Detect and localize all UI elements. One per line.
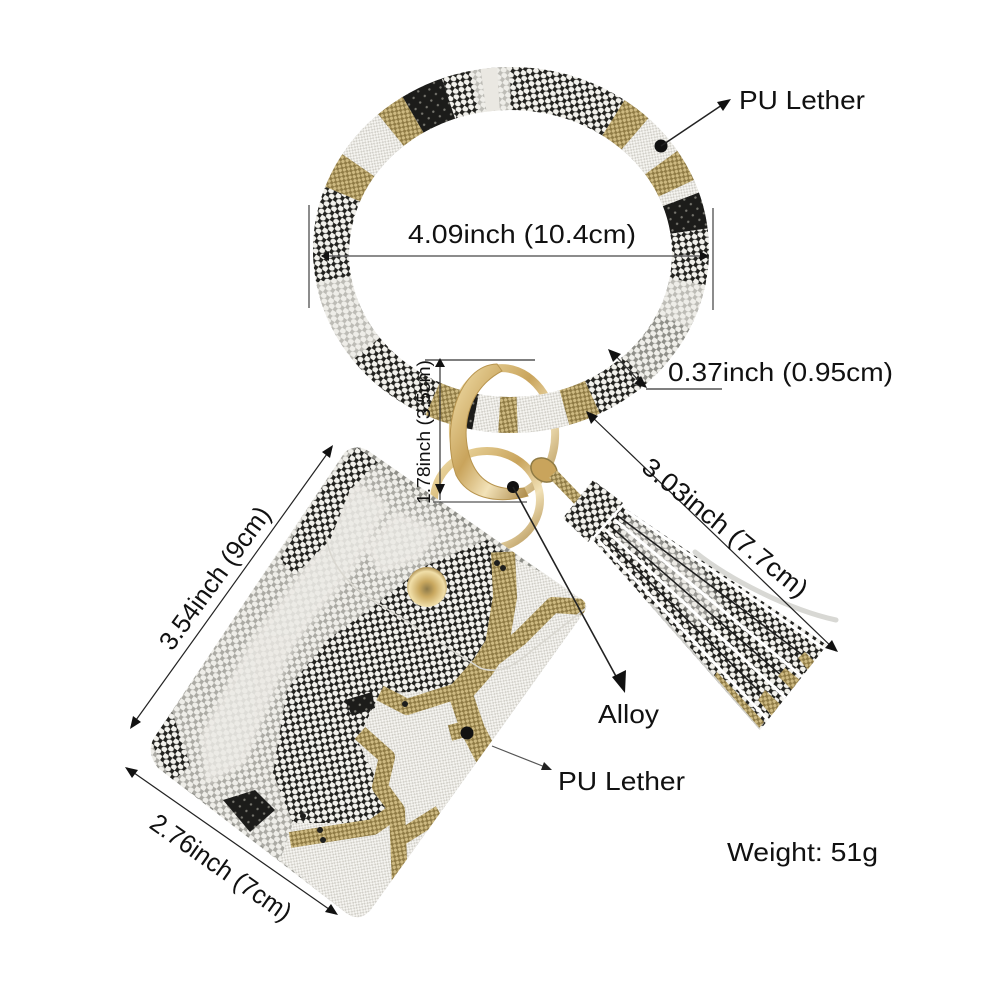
- dimension: ring diameter: 4.09inch (10.4cm): [408, 219, 636, 249]
- tassel: [563, 480, 836, 735]
- callout: PU Lether on ring: PU Lether: [739, 85, 865, 115]
- pouch small black spots: [300, 560, 506, 843]
- second gold key ring: [434, 451, 540, 549]
- tassel strands: [590, 500, 830, 735]
- pouch dark scale region: [273, 540, 510, 823]
- dimension: ring diameter: [309, 205, 713, 310]
- dimension: clasp height: [414, 358, 535, 504]
- carabiner gold ring (front crescent): [450, 364, 528, 500]
- pouch gold snake bands: [290, 552, 585, 885]
- dimension: clasp height: 1.78inch (3.5cm): [414, 360, 434, 504]
- pouch flap edge: [326, 535, 590, 670]
- dimension: pouch height: [130, 445, 333, 729]
- callout: PU Lether on ring: [654, 85, 865, 152]
- callout: Alloy: Alloy: [598, 699, 659, 729]
- pouch white marble streaks: [200, 480, 440, 785]
- dimension: pouch height: 3.54inch (9cm): [153, 500, 277, 656]
- pouch top scale streaks: [150, 447, 378, 782]
- dimension: ring thickness: [608, 349, 893, 389]
- wristlet bangle ring: [300, 60, 720, 440]
- pouch black patches: [223, 692, 375, 832]
- callout: PU Lether on pouch: [460, 726, 685, 796]
- tassel clasp and connector: [526, 453, 578, 500]
- dimension: pouch width: [125, 767, 338, 927]
- pouch lighter scale area: [150, 450, 500, 860]
- dimension: ring thickness: 0.37inch (0.95cm): [668, 357, 893, 387]
- pouch white scale region: [280, 557, 600, 930]
- weight label: Weight: 51g: [727, 837, 878, 867]
- dimension: pouch width: 2.76inch (7cm): [145, 807, 298, 927]
- tassel cap: [563, 480, 623, 542]
- pouch snap button: [407, 567, 447, 607]
- callout: PU Lether on pouch: PU Lether: [558, 766, 685, 796]
- dimension: tassel length: 3.03inch (7.7cm): [636, 451, 814, 604]
- pouch card holder: [140, 440, 600, 930]
- tassel loose white thread: [695, 552, 836, 620]
- callout: Alloy: [507, 481, 659, 729]
- dimension: tassel length: [586, 411, 838, 652]
- carabiner gold ring (back): [448, 364, 560, 500]
